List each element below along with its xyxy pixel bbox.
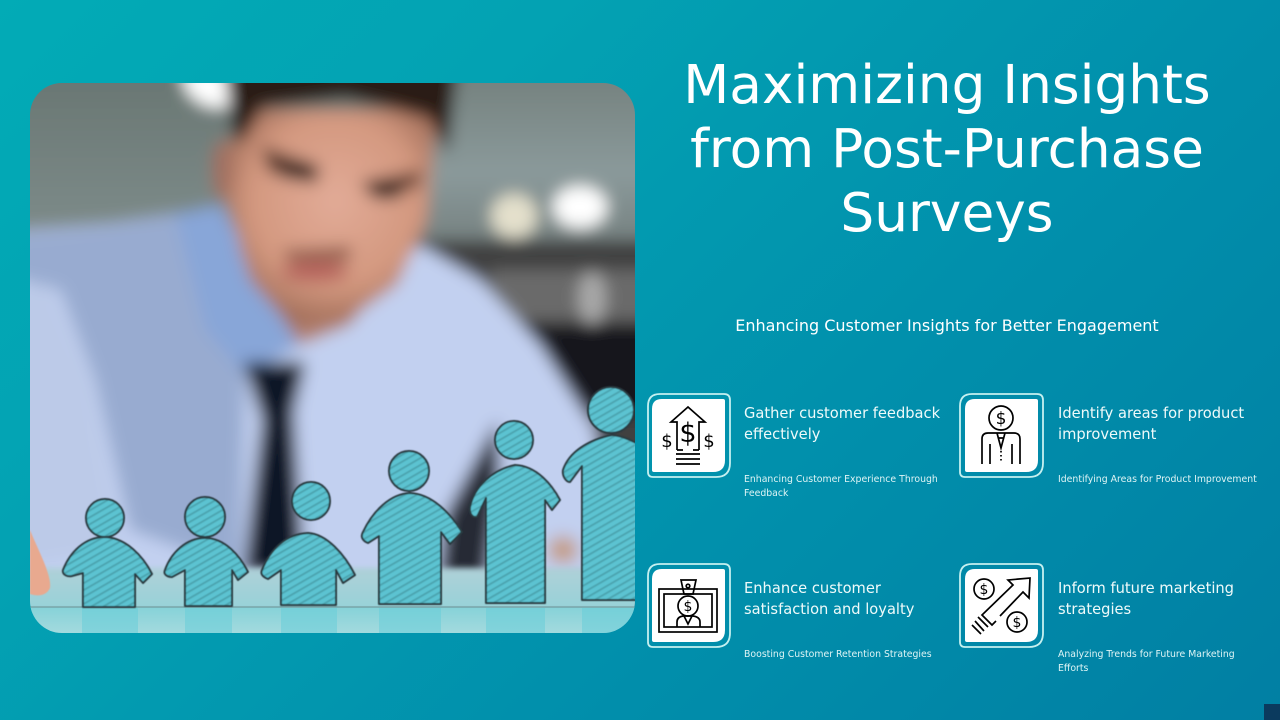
- heading: marketing: Inform future marketing: [1058, 580, 1234, 596]
- description: product improvement: Identifying Areas for Product Improvement: [1058, 474, 1257, 484]
- icon card: marketing, growth arrow: $: [980, 582, 988, 598]
- description: marketing: Analyzing Trends for Future Marketing: [1058, 648, 1235, 660]
- icon card: marketing, growth arrow: [959, 563, 1044, 648]
- title: Maximizing Insights: [683, 54, 1211, 116]
- figure 4: [362, 451, 462, 604]
- heading: satisfaction: satisfaction and loyalty: [744, 600, 914, 618]
- heading: gather feedback: effectively: [744, 426, 820, 442]
- description: satisfaction: Boosting Customer Retention Strategies: [744, 648, 932, 660]
- people figures rising from left to right: [63, 387, 650, 607]
- figure 6: [561, 386, 635, 602]
- description: marketing: [1058, 648, 1235, 674]
- heading: satisfaction: Enhance customer: [744, 580, 881, 596]
- figure 3: [261, 482, 355, 605]
- heading: product improvement: Identify areas for product: [1058, 404, 1244, 422]
- heading: marketing: strategies: [1058, 600, 1131, 618]
- description: marketing: Efforts: [1058, 662, 1088, 674]
- icon card: satisfaction, id badge: [647, 563, 731, 648]
- table surface: [20, 568, 645, 633]
- title: from Post-Purchase: [690, 118, 1204, 180]
- title: Surveys: [840, 182, 1054, 244]
- figure 1: [63, 499, 152, 607]
- icon card: gather feedback, dollar up arrow: $: [679, 418, 697, 449]
- icon card: gather feedback, dollar up arrow: $: [661, 431, 673, 452]
- heading: product improvement: [1058, 404, 1244, 442]
- icon card: marketing, growth arrow: $: [1013, 615, 1021, 631]
- icon card: product improvement, businessman: [959, 393, 1044, 478]
- photo: businessman arranging hand-drawn people figures: [30, 83, 635, 633]
- description: gather feedback: Feedback: [744, 488, 788, 498]
- icon card: satisfaction, id badge: $: [684, 599, 692, 615]
- heading: product improvement: improvement: [1058, 426, 1156, 442]
- figure 2: [164, 497, 248, 606]
- blurred photo background and man: [30, 83, 635, 608]
- heading: gather feedback: [744, 404, 940, 442]
- icon card: gather feedback, dollar up arrow: [647, 393, 731, 478]
- figure 5: [470, 421, 560, 603]
- icon card: gather feedback, dollar up arrow: $: [703, 431, 715, 452]
- corner marker: [1264, 704, 1280, 720]
- heading: marketing: [1058, 580, 1234, 618]
- subtitle: Enhancing Customer Insights for Better Engagement: [735, 316, 1159, 335]
- icon card: product improvement, businessman: $: [996, 409, 1006, 429]
- description: gather feedback: [744, 474, 938, 498]
- heading: gather feedback: Gather customer feedback: [744, 404, 940, 422]
- description: gather feedback: Enhancing Customer Experience Through: [744, 474, 938, 484]
- heading: satisfaction: [744, 580, 914, 618]
- hand at left edge: [30, 530, 50, 595]
- title: [683, 54, 1211, 244]
